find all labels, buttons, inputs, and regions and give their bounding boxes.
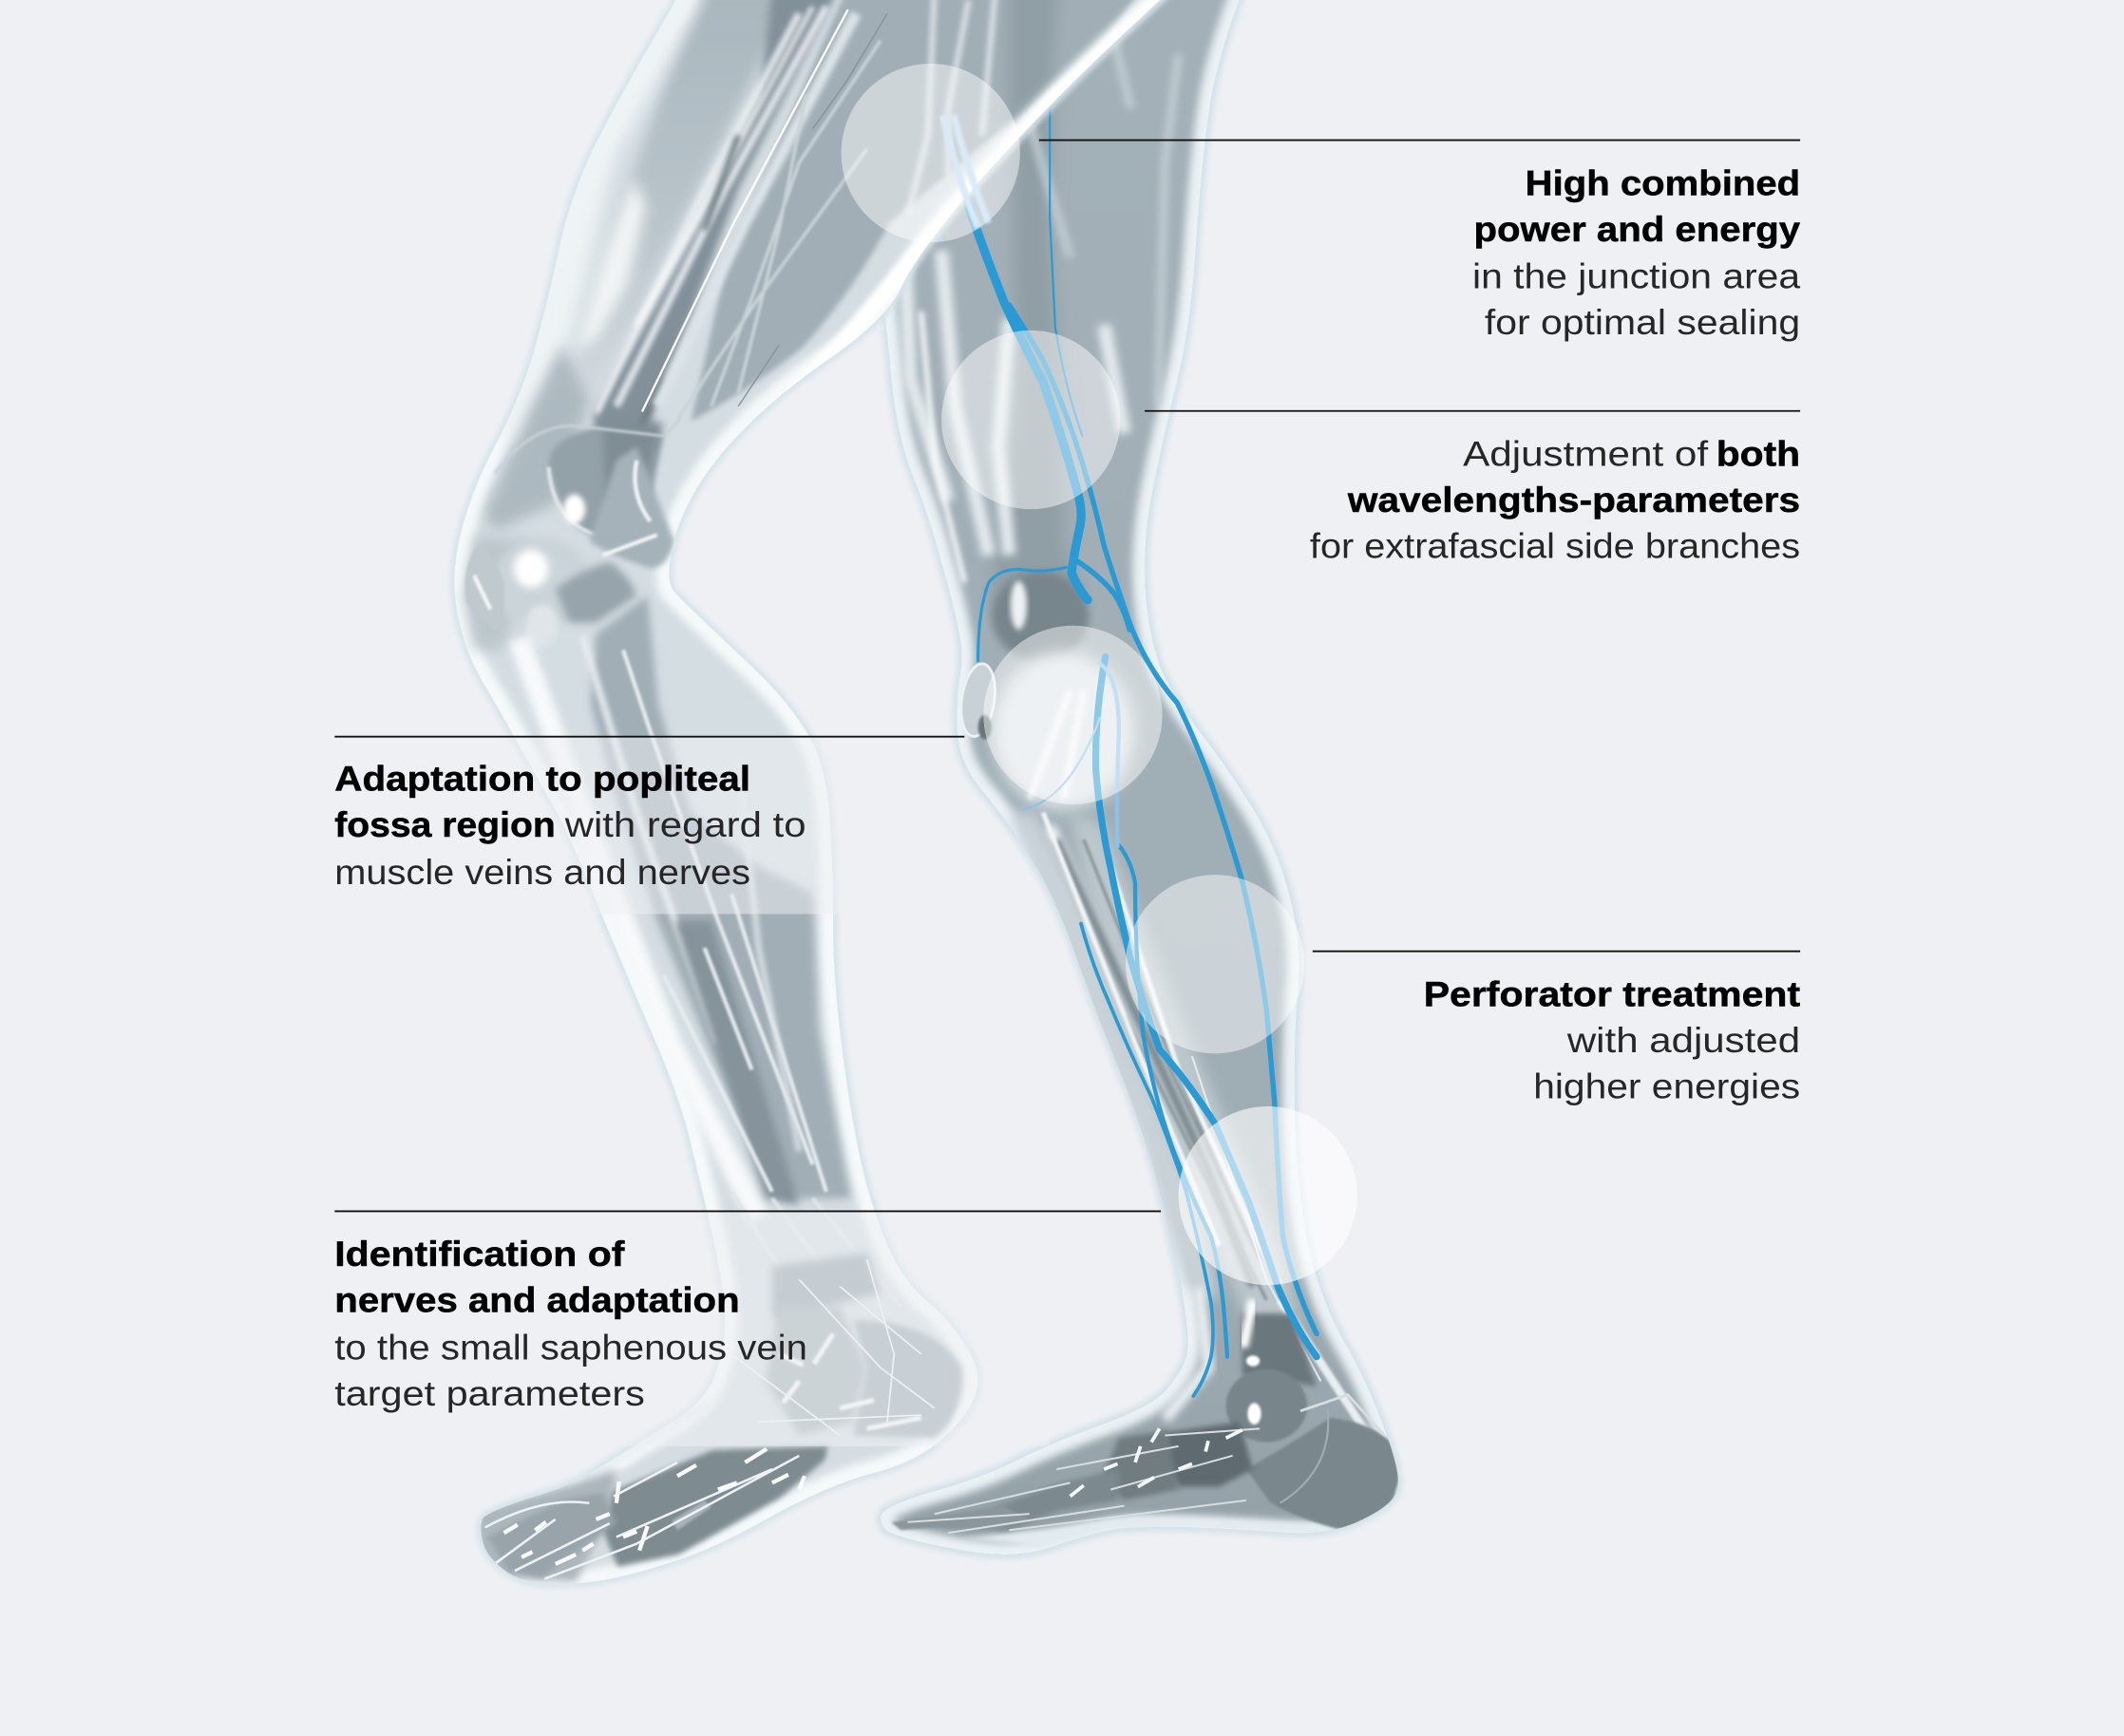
- anterior branch: [1009, 305, 1317, 1334]
- right femur: [990, 112, 1070, 598]
- right lower leg tendon band: [1280, 1300, 1368, 1435]
- second lower vein: [1117, 843, 1227, 1357]
- right leg with veins: [871, 0, 1399, 1555]
- posterior condyle: [589, 447, 674, 568]
- callout: identification of nerves: target parameters: [334, 1373, 645, 1413]
- left thigh gray inner region: [691, 0, 1165, 421]
- right knee light area: [993, 652, 1134, 810]
- callout: adaptation to popliteal fossa: fossa region: [334, 804, 556, 844]
- right foot mid bones: [1100, 1430, 1179, 1500]
- right femur seen through: [1009, 0, 1059, 128]
- left patella: [465, 544, 504, 632]
- line: side branches: [1145, 410, 1800, 412]
- left foot top rim highlight: [582, 1402, 711, 1479]
- left femur dark band: [589, 0, 840, 475]
- line: perforator: [1313, 951, 1800, 953]
- thigh outer rim: [454, 0, 1260, 1584]
- callout: adjustment of both wavelengths: Adjustment of: [1463, 434, 1709, 474]
- femur highlights: [596, 7, 826, 413]
- left tibia head: [493, 538, 591, 627]
- left leg: [449, 0, 1169, 1589]
- left tarsal bits: [779, 1334, 921, 1428]
- right front ankle band: [1165, 1287, 1208, 1419]
- callout: high combined power and energy: in the junction area: [1472, 256, 1801, 296]
- veins: [951, 92, 1317, 1396]
- lower shin strands: [731, 1192, 901, 1307]
- left shin dark band: [674, 921, 799, 1205]
- left knee condyle: [549, 426, 664, 535]
- tibia white strands: [519, 639, 759, 1218]
- right foot tarsals: [1163, 1422, 1253, 1487]
- left heel: [853, 1320, 962, 1438]
- knee connection branch: [1074, 559, 1129, 630]
- right toes: [891, 1506, 1030, 1530]
- callout: high combined power and energy: for optimal sealing: [1485, 302, 1800, 342]
- line: small saphenous: [334, 1210, 1161, 1212]
- right heel: [1246, 1418, 1399, 1529]
- strands through overlap: [907, 0, 996, 217]
- knee arc lines: [495, 420, 680, 474]
- femur lower tip: [603, 423, 664, 541]
- third lower vein: [1081, 923, 1213, 1396]
- lower main vein: [1095, 657, 1317, 1357]
- metatarsal gap: [672, 1500, 711, 1530]
- callout: high combined power and energy: power and energy: [1473, 209, 1801, 249]
- thigh soft highlight: [576, 178, 646, 352]
- thigh fine nerves: [677, 41, 881, 420]
- callout: adaptation to popliteal fossa: with regard to: [564, 804, 806, 844]
- great saphenous vein: [951, 136, 1088, 600]
- highlight circles: [842, 64, 1357, 1285]
- callout: perforator treatment: higher energies: [1533, 1066, 1800, 1105]
- callout: adjustment of both wavelengths: [1310, 434, 1800, 565]
- circle: side branches: [941, 330, 1120, 509]
- line: popliteal: [334, 736, 964, 738]
- left talus region: [766, 1307, 867, 1435]
- thigh highlight strands: [1028, 44, 1184, 405]
- callout: adaptation to popliteal fossa: muscle veins and nerves: [334, 852, 750, 892]
- right talus: [1226, 1369, 1307, 1443]
- circle: junction: [842, 64, 1020, 242]
- callout: perforator treatment: Perforator treatment: [1424, 973, 1800, 1013]
- leader lines: [334, 141, 1800, 1211]
- right patella: [962, 663, 996, 738]
- thigh quad muscle: [578, 0, 799, 406]
- left toes: [487, 1492, 616, 1577]
- callout: adaptation to popliteal fossa: [334, 759, 806, 892]
- text backing panel: popliteal: [334, 737, 877, 914]
- callout: perforator treatment: [1424, 973, 1800, 1105]
- callout: perforator treatment: with adjusted: [1566, 1020, 1800, 1060]
- callout: identification of nerves: nerves and adaptation: [334, 1280, 740, 1320]
- thigh bright dividing line: [657, 13, 856, 406]
- callout: identification of nerves: [334, 1234, 807, 1413]
- callout: high combined power and energy: High combined: [1526, 162, 1800, 202]
- callout: adjustment of both wavelengths: both: [1716, 434, 1800, 474]
- knee outer gray: [464, 535, 535, 650]
- callout: identification of nerves: Identification of: [334, 1234, 625, 1274]
- callout: adjustment of both wavelengths: wavelengths-parameters: [1347, 480, 1800, 519]
- callout: high combined power and energy: [1472, 162, 1801, 342]
- circle: small saphenous: [1179, 1106, 1357, 1285]
- left toes gray band: [477, 1469, 616, 1581]
- under-knee gray core: [591, 595, 851, 1198]
- right tibia end: [1242, 1313, 1317, 1387]
- knee upper gray: [485, 346, 589, 531]
- right tibia band: [1071, 813, 1300, 1334]
- circle: popliteal: [983, 626, 1163, 804]
- callout: adaptation to popliteal fossa: Adaptation to popliteal: [334, 759, 750, 799]
- circle: perforator: [1126, 875, 1304, 1053]
- thin upper vein: [1050, 92, 1082, 436]
- right front shin pale band: [1009, 813, 1219, 1300]
- text backing panel: small saphenous: [334, 1211, 1050, 1446]
- left ankle bones: [772, 1253, 881, 1341]
- knee lower light vein: [1100, 664, 1119, 846]
- right foot underside glow: [967, 1515, 1157, 1544]
- dark tibia plateau: [556, 562, 636, 623]
- right foot metatarsals: [996, 1469, 1119, 1530]
- right knee condyle: [992, 572, 1090, 661]
- callout: adjustment of both wavelengths: for extrafascial side branches: [1310, 525, 1800, 565]
- callout: identification of nerves: to the small saphenous vein: [334, 1328, 807, 1368]
- pale saphenous vein over thigh edge: [943, 115, 989, 228]
- knee arc branch: [978, 567, 1066, 661]
- left foot metatarsals: [603, 1446, 827, 1567]
- line: junction: [1039, 140, 1800, 142]
